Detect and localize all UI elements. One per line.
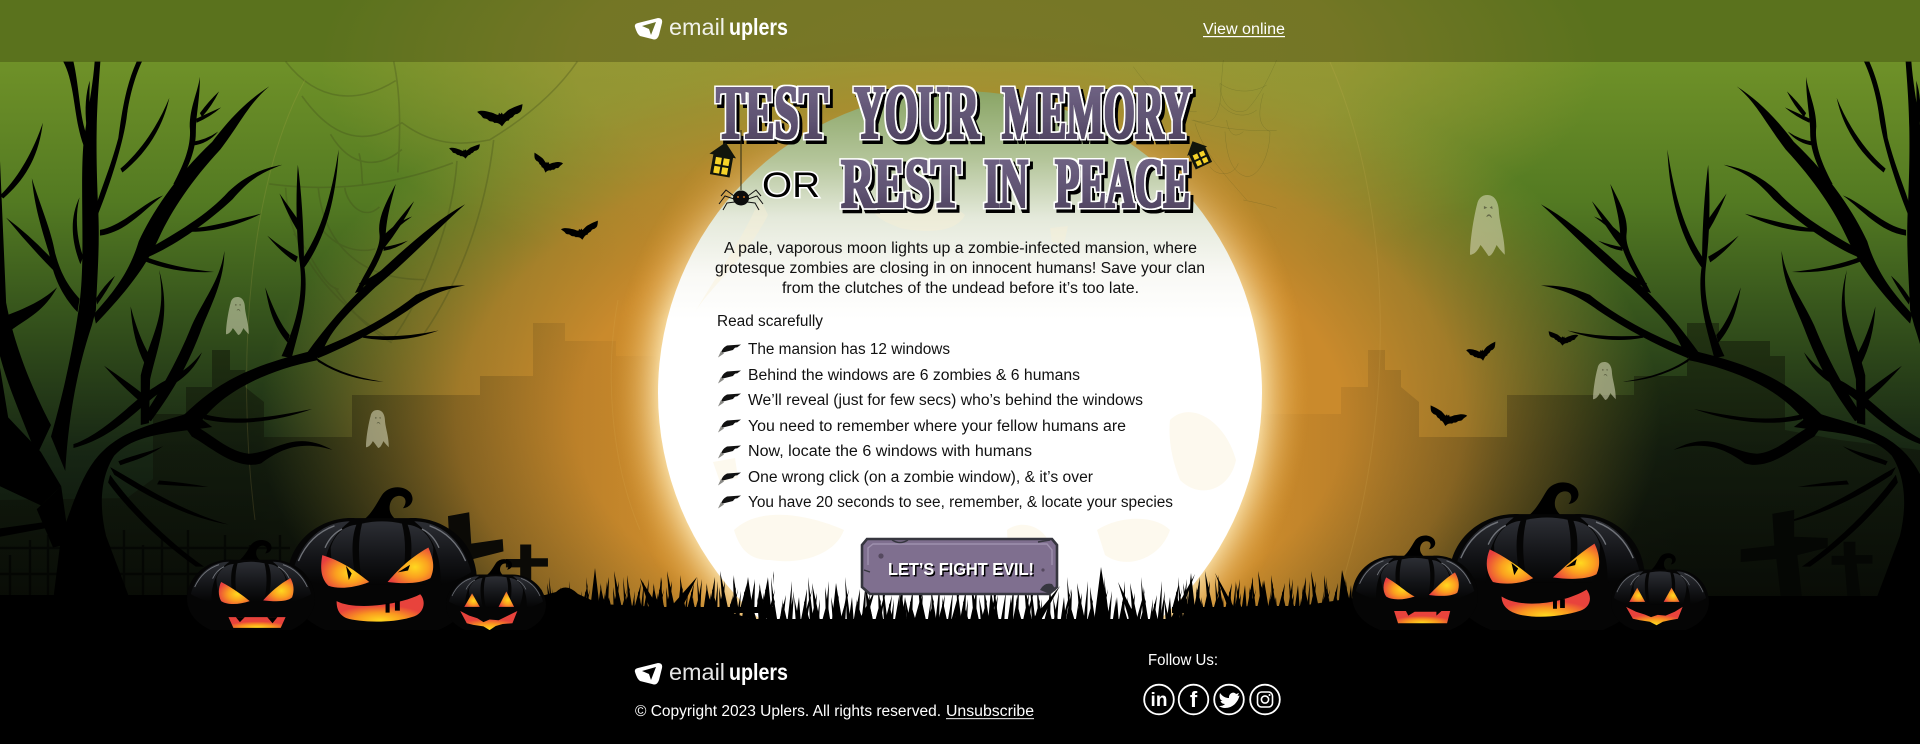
logo: email uplers footer: uplers (729, 659, 788, 685)
icon: lantern right (1183, 137, 1214, 170)
rules list (748, 341, 1173, 511)
grave crosses right (1741, 510, 1872, 620)
pumpkin: medium left (187, 540, 315, 637)
ghosts (226, 195, 1616, 448)
title line 2: IN (984, 145, 1028, 223)
fence (0, 530, 300, 600)
city silhouette left (0, 323, 660, 620)
icon: lantern left (706, 140, 738, 178)
pumpkin: big right (1449, 482, 1645, 640)
button: let's fight evil (862, 539, 1057, 594)
rules list: You have 20 seconds to see, remember, & locate your species (748, 494, 1173, 511)
rules list: Now, locate the 6 windows with humans (748, 443, 1032, 460)
header bar (0, 0, 1920, 62)
title line 1: TEST (716, 71, 828, 155)
copyright and unsubscribe: © Copyright 2023 Uplers. All rights reserved. (635, 703, 941, 720)
heading: read scarefully: Read scarefully (717, 313, 823, 330)
intro paragraph: from the clutches of the undead before it’s too late. (782, 280, 1139, 297)
rules list: You need to remember where your fellow humans are (748, 418, 1126, 435)
copyright and unsubscribe: Unsubscribe (946, 703, 1034, 720)
thin moon glow arcs (247, 62, 1380, 590)
logo: email uplers header: email (669, 14, 725, 40)
title line 1: MEMORY (1002, 71, 1191, 155)
city silhouette right (1260, 323, 1920, 620)
footer panel (0, 630, 1920, 744)
intro paragraph: grotesque zombies are closing in on innocent humans! Save your clan (715, 260, 1205, 277)
pumpkin: big left (287, 487, 477, 640)
rules list: The mansion has 12 windows (748, 341, 950, 358)
pumpkin: medium right (1352, 535, 1478, 636)
title OR: OR (762, 166, 820, 205)
cobweb left (269, 61, 577, 343)
icon: spider on thread (719, 130, 763, 210)
ground and grass (0, 563, 1920, 744)
logo: email uplers header (635, 14, 788, 40)
list bullet icons (718, 344, 741, 508)
rules list: Behind the windows are 6 zombies & 6 humans (748, 367, 1080, 384)
pumpkin: small right (1611, 553, 1709, 634)
rules list: One wrong click (on a zombie window), & it’s over (748, 469, 1093, 486)
title line 2: REST (841, 145, 961, 223)
bats (449, 104, 1579, 430)
social icons: f (1190, 687, 1198, 712)
logo: email uplers footer (635, 659, 788, 685)
title line 2: PEACE (1055, 145, 1190, 223)
title line 1: YOUR (854, 71, 980, 155)
social icons: in (1151, 690, 1167, 711)
social icons (1144, 685, 1280, 714)
link: view online: View online (1203, 21, 1285, 38)
intro paragraph (715, 240, 1205, 297)
title line 2 (841, 145, 1190, 223)
tree left (0, 61, 465, 601)
moon (658, 91, 1262, 695)
intro paragraph: A pale, vaporous moon lights up a zombie-infected mansion, where (724, 240, 1197, 257)
rules list: We’ll reveal (just for few secs) who’s behind the windows (748, 392, 1143, 409)
logo: email uplers footer: email (669, 659, 725, 685)
cobweb right (1133, 60, 1277, 208)
button: let's fight evil: LET’S FIGHT EVIL! (888, 559, 1034, 579)
tree right (1541, 61, 1920, 601)
pumpkin: small left (446, 559, 546, 636)
logo: email uplers header: uplers (729, 14, 788, 40)
title line 1 (716, 71, 1191, 155)
button: let's fight evil: LET’S FIGHT EVIL! (890, 560, 1036, 580)
follow us label: Follow Us: (1148, 652, 1218, 669)
grave crosses left (448, 512, 548, 609)
